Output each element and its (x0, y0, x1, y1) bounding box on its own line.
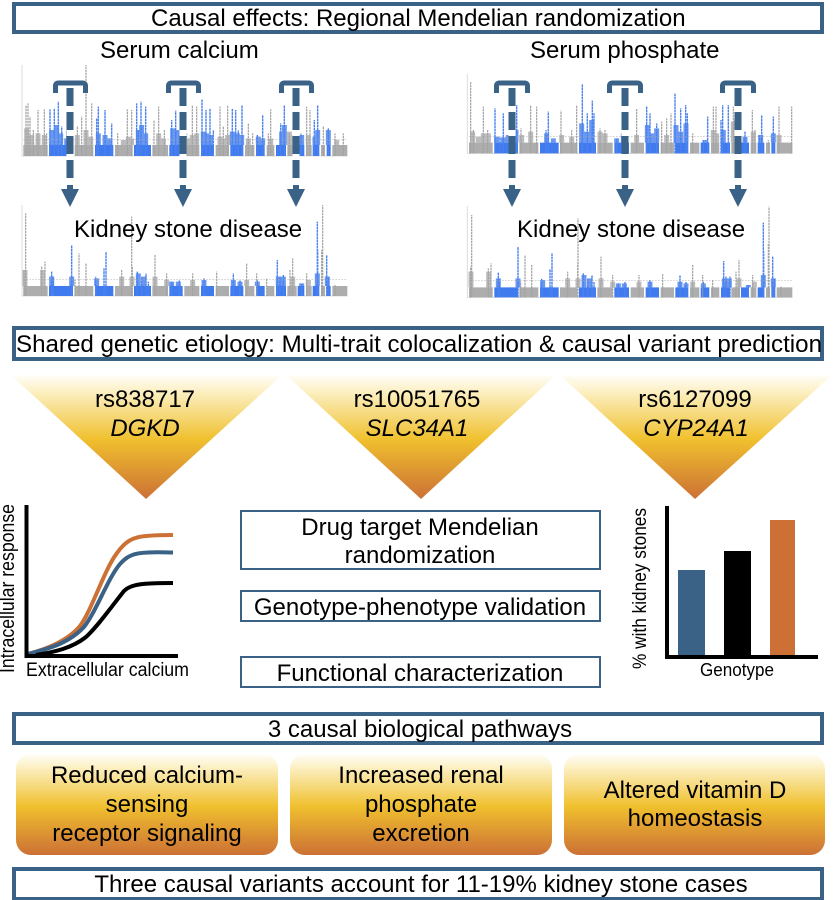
curve: black (36, 583, 173, 655)
bar: orange (770, 520, 795, 655)
heading: kidney stone disease, right: Kidney stone disease (517, 216, 745, 243)
curve: orange (28, 535, 173, 654)
conclusion box: Three causal variants account for 11-19% kidney stone cases (94, 871, 748, 898)
bar: blue (678, 570, 705, 655)
triangle: rs838717 DGKD: rs838717 (95, 386, 195, 413)
curve: blue (28, 552, 173, 654)
manhattan plot: kidney stone disease, left (22, 205, 347, 296)
pathway card: calcium-sensing: sensing (106, 791, 188, 818)
box: genotype-phenotype validation: Genotype-phenotype validation (254, 594, 586, 621)
pathway card: calcium-sensing: receptor signaling (52, 820, 242, 847)
triangle: rs6127099 CYP24A1: CYP24A1 (643, 415, 749, 442)
box: drug target MR: Drug target Mendelian (301, 514, 539, 541)
heading: serum calcium: Serum calcium (100, 37, 259, 64)
pathway card: vitamin D: homeostasis (628, 805, 762, 832)
line chart: intracellular response (0, 504, 189, 681)
heading: serum phosphate: Serum phosphate (530, 37, 719, 64)
bar chart: percent with kidney stones (630, 506, 818, 680)
triangle: rs6127099 CYP24A1 (560, 375, 832, 499)
y axis label: % with kidney stones (630, 508, 651, 669)
x axis label: Genotype (700, 660, 774, 680)
pathway card: calcium-sensing (16, 754, 278, 855)
bar: black (724, 551, 751, 655)
arrow 6 (722, 83, 754, 207)
triangle: rs838717 DGKD (11, 375, 282, 499)
arrow 1 (56, 83, 86, 207)
axes (667, 506, 818, 657)
triangle: rs10051765 SLC34A1 (286, 375, 556, 499)
triangle: rs838717 DGKD: DGKD (110, 415, 180, 442)
triangle: rs6127099 CYP24A1: rs6127099 (638, 386, 752, 413)
arrows: phosphate to kidney stone (496, 83, 754, 207)
manhattan plot: serum phosphate (467, 74, 792, 153)
pathway card: renal phosphate: phosphate (365, 791, 477, 818)
pathway card: calcium-sensing: Reduced calcium- (51, 762, 243, 789)
arrow 5 (610, 83, 640, 207)
arrow 4 (496, 83, 528, 207)
header: causal effects (14, 4, 822, 32)
box: functional characterization: Functional characterization (277, 660, 563, 687)
triangle: rs10051765 SLC34A1: rs10051765 (354, 386, 480, 413)
pathway card: vitamin D: Altered vitamin D (604, 777, 786, 804)
pathway card: renal phosphate: excretion (372, 820, 470, 847)
box: drug target MR: randomization (345, 542, 495, 569)
header: shared genetic etiology: Shared genetic etiology: Multi-trait colocalization & causal variant prediction (16, 331, 822, 358)
header: 3 causal biological pathways (14, 714, 822, 743)
manhattan plot: kidney stone disease, right (467, 206, 792, 297)
pathway card: renal phosphate: Increased renal (338, 762, 504, 789)
pathway card: vitamin D (564, 754, 825, 855)
axes (26, 505, 178, 656)
header: 3 causal biological pathways: 3 causal biological pathways (268, 716, 572, 743)
arrows: calcium to kidney stone (56, 83, 312, 207)
manhattan plot: serum calcium (22, 65, 347, 156)
arrow 2 (168, 83, 198, 207)
box: drug target MR (241, 511, 600, 569)
pathway card: renal phosphate (290, 754, 552, 855)
arrow 3 (282, 83, 312, 207)
triangle: rs10051765 SLC34A1: SLC34A1 (366, 415, 468, 442)
x axis label: Extracellular calcium (26, 660, 189, 681)
header: causal effects: Causal effects: Regional Mendelian randomization (151, 5, 686, 32)
heading: kidney stone disease, left: Kidney stone disease (74, 216, 302, 243)
